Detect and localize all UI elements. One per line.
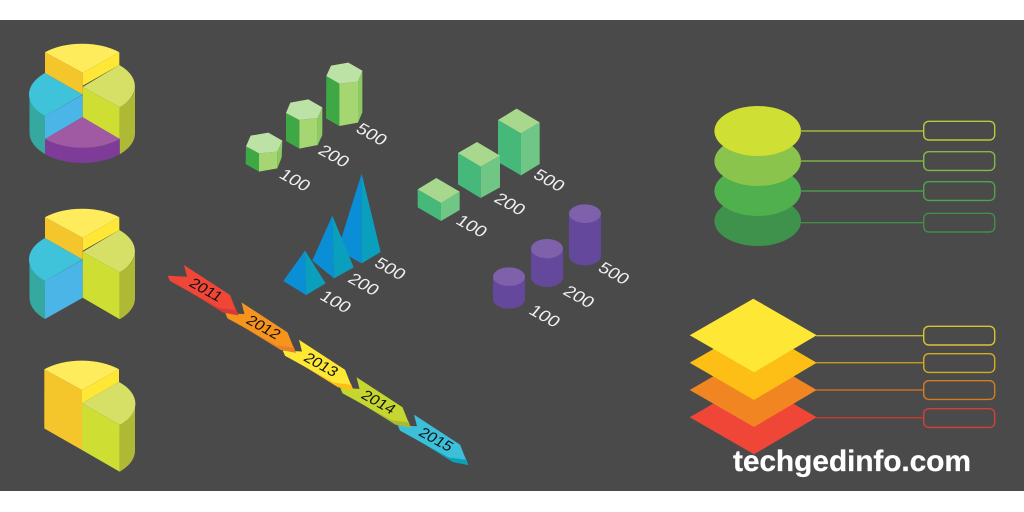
stacked ellipses with callouts xyxy=(714,106,995,246)
cylinder bars: 200 xyxy=(559,282,599,312)
arrow: 2014: 2014 xyxy=(358,388,399,418)
stacked diamonds with callouts xyxy=(690,299,995,454)
cube bars: 100 xyxy=(452,211,491,241)
hexagonal prism bars: 100 xyxy=(275,165,315,195)
hexagonal prism bars xyxy=(246,63,391,195)
arrow: 2015 xyxy=(398,415,468,465)
arrow: 2012: 2012 xyxy=(243,313,284,343)
cube bars: 200 xyxy=(490,189,530,219)
cylinder bars xyxy=(493,204,634,331)
pyramid bars xyxy=(283,174,410,317)
arrow: 2012 xyxy=(225,302,296,353)
callout lines and boxes xyxy=(816,326,995,427)
cube bars: 500 xyxy=(530,165,569,195)
cylinder bars: 500 xyxy=(594,258,634,288)
pie chart: five segments xyxy=(29,44,135,163)
pyramid bars: 500 xyxy=(371,254,410,284)
timeline arrows 2011 to 2015 xyxy=(168,265,468,465)
pie chart: four segments xyxy=(29,209,135,319)
diamond stack xyxy=(690,299,817,454)
ellipse stack xyxy=(714,106,801,246)
arrow: 2013 xyxy=(283,340,354,390)
arrow: 2013: 2013 xyxy=(300,350,341,380)
pyramid bars: 200 xyxy=(344,269,383,299)
arrow: 2011 xyxy=(168,265,238,316)
arrow: 2011: 2011 xyxy=(186,276,226,305)
callout lines and boxes xyxy=(800,121,995,232)
arrow: 2014 xyxy=(340,377,411,428)
cylinder bars: 100 xyxy=(525,301,564,331)
cube bars xyxy=(418,109,569,241)
website label: techgedinfo.com xyxy=(733,445,971,478)
arrow: 2015: 2015 xyxy=(415,425,456,455)
pie chart: two segments xyxy=(44,361,135,472)
pyramid bars: 100 xyxy=(316,287,355,317)
hexagonal prism bars: 200 xyxy=(314,141,354,171)
hexagonal prism bars: 500 xyxy=(352,119,391,149)
